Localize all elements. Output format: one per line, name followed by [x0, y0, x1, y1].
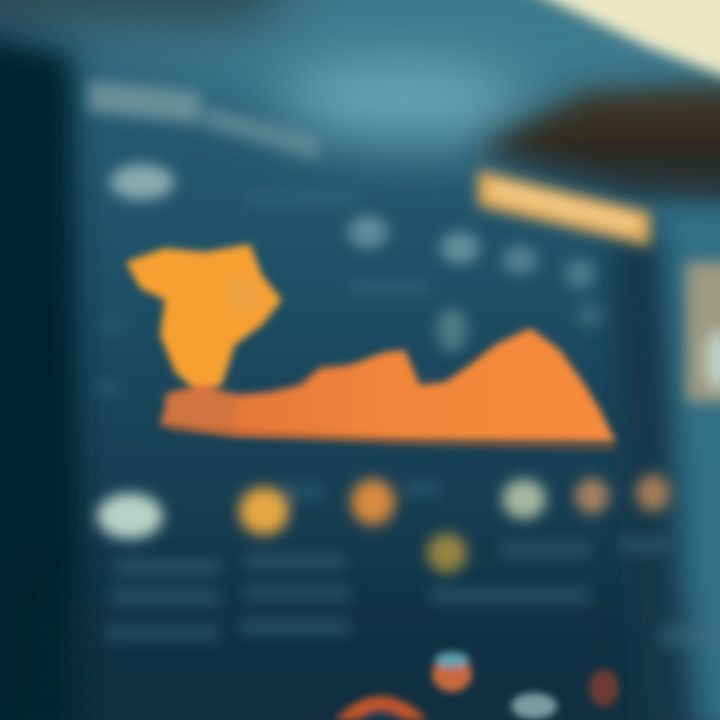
right side panel [612, 195, 720, 720]
chart baseline glow [170, 428, 615, 448]
stat row icons [97, 474, 670, 573]
small labels [95, 164, 604, 394]
bottom icons [335, 652, 619, 720]
lower text blocks [105, 538, 720, 647]
ceiling band [0, 0, 720, 150]
dark ceiling wedge [478, 85, 720, 200]
bottom shade [60, 600, 720, 720]
title bars [88, 80, 320, 160]
banner: orange highlight [478, 170, 650, 246]
ceiling light strip [508, 0, 720, 90]
far right box [686, 262, 720, 402]
left dark edge [0, 30, 82, 720]
area chart [160, 328, 616, 442]
map shape [126, 244, 282, 395]
